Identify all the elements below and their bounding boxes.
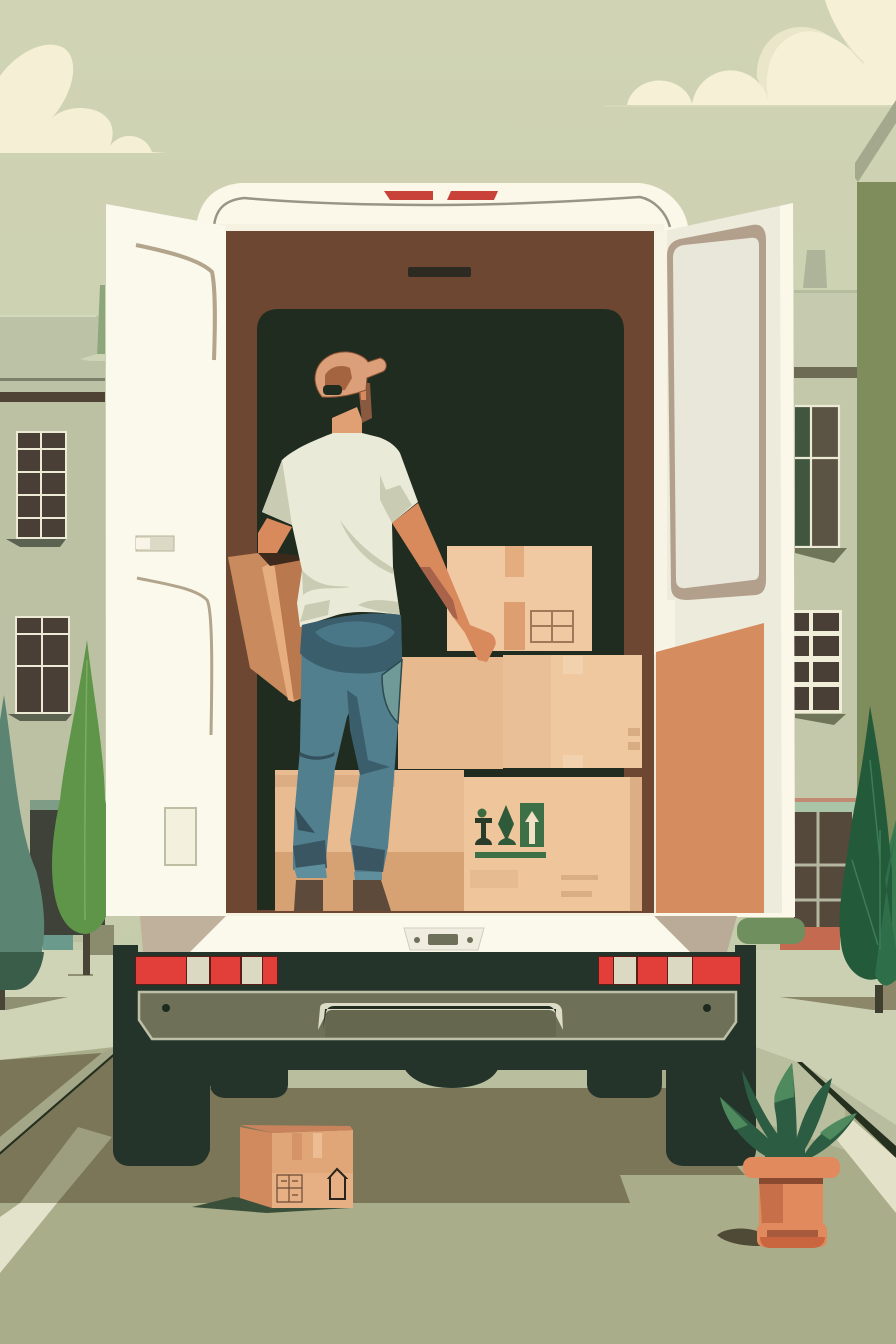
sky background — [0, 0, 896, 960]
boxes: stacked — [275, 546, 642, 911]
person: jeans pocket — [382, 660, 402, 723]
person: jeans waist shading — [300, 613, 402, 674]
package: label — [277, 1175, 302, 1202]
label: handling symbols — [475, 803, 546, 858]
tree: far left — [0, 695, 44, 1010]
van: right door — [654, 203, 795, 917]
van: brown interior — [226, 231, 654, 913]
ground: left road edge — [0, 1053, 102, 1137]
van: left step shadow — [140, 916, 226, 952]
window: left upper — [6, 431, 67, 547]
person: cap — [315, 352, 386, 397]
ground: hedge — [737, 918, 805, 944]
box: bottom — [275, 770, 642, 911]
cloud: top left — [0, 45, 166, 153]
person: mover — [228, 352, 496, 911]
door: orange panel — [656, 623, 764, 913]
building: left — [0, 285, 105, 955]
van: wheels rear — [113, 945, 756, 1166]
person: neck and beard — [332, 407, 362, 435]
van: left door — [106, 204, 226, 916]
package: shadow — [192, 1197, 350, 1213]
van: floor and bumper — [113, 916, 756, 1166]
person: right arm — [392, 503, 496, 662]
ground: road surface — [0, 1057, 745, 1203]
building: right — [780, 100, 896, 1000]
package: lid — [240, 1125, 353, 1133]
package: front face — [272, 1130, 353, 1208]
plant: leaves — [720, 1063, 857, 1158]
package: up arrow — [329, 1169, 346, 1199]
ground: base — [0, 1040, 896, 1344]
tree: green left — [52, 640, 114, 975]
plant: pot — [759, 1178, 823, 1224]
trees: left — [0, 640, 114, 1010]
van: floor — [190, 916, 690, 952]
person: jeans folds — [347, 690, 390, 775]
person: left arm — [258, 518, 292, 557]
ground: left sidewalk — [0, 950, 114, 1060]
ground: sidewalk and road — [0, 918, 896, 1344]
package on road — [192, 1125, 353, 1213]
door: window — [667, 225, 766, 600]
person: carried box — [228, 553, 302, 702]
cloud: top right — [603, 0, 896, 106]
van: chassis — [113, 952, 756, 1070]
ground: right sidewalk — [755, 950, 896, 1127]
person: t-shirt — [262, 433, 418, 627]
person: shirt folds — [262, 460, 412, 622]
ground: left white stripe — [20, 1127, 112, 1203]
van: tail lights left — [135, 956, 278, 985]
window: right upper — [795, 405, 847, 563]
ground: right white stripe — [837, 1120, 896, 1213]
van: dome handle — [408, 267, 471, 277]
van: bumper — [139, 992, 736, 1039]
van: tail lights right — [598, 956, 741, 985]
person: cuffs — [293, 840, 385, 875]
ground: tree shadows — [0, 997, 68, 1010]
box: top — [447, 546, 592, 651]
window: right lower — [794, 610, 846, 725]
building: left roof spike — [97, 285, 105, 358]
van: right step shadow — [654, 916, 737, 952]
van: roof and body — [196, 183, 688, 920]
person: boots — [294, 880, 391, 911]
van: latch — [404, 928, 484, 950]
van: dark cargo space — [257, 309, 624, 910]
potted plant — [717, 1063, 857, 1248]
package: left face — [240, 1127, 272, 1208]
plant: tree right — [840, 706, 896, 1013]
plant: shadow — [717, 1228, 760, 1246]
entrance: right ground floor — [780, 798, 857, 950]
ground: right curb — [797, 1062, 896, 1158]
person: jeans — [293, 613, 402, 872]
window: left lower — [8, 616, 72, 721]
box: middle — [398, 655, 642, 769]
